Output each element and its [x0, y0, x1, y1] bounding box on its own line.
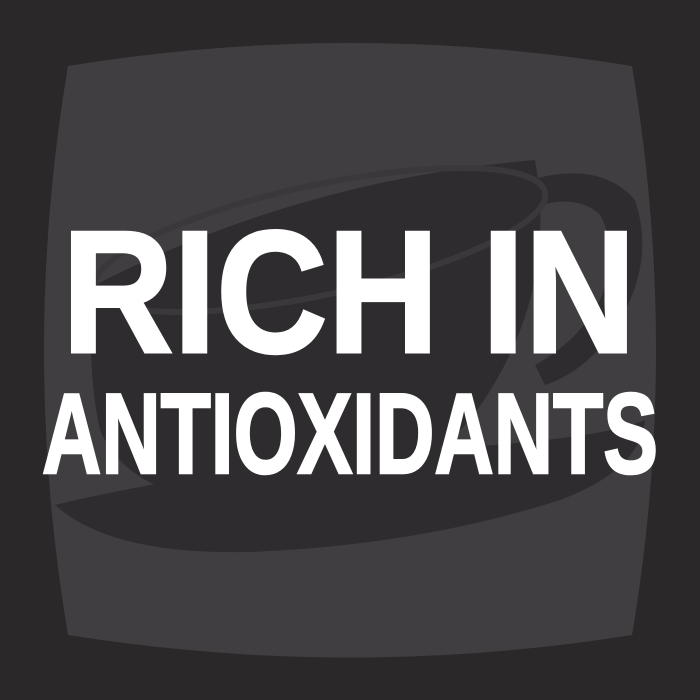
handle: [530, 173, 642, 385]
icon: coffee cup silhouette: [55, 138, 645, 552]
rim highlight ring: [84, 138, 556, 342]
saucer: [55, 420, 645, 552]
cup body: [91, 160, 540, 505]
panel: rounded badge: [44, 43, 656, 658]
heading: RICH IN: RICH IN: [62, 194, 636, 389]
